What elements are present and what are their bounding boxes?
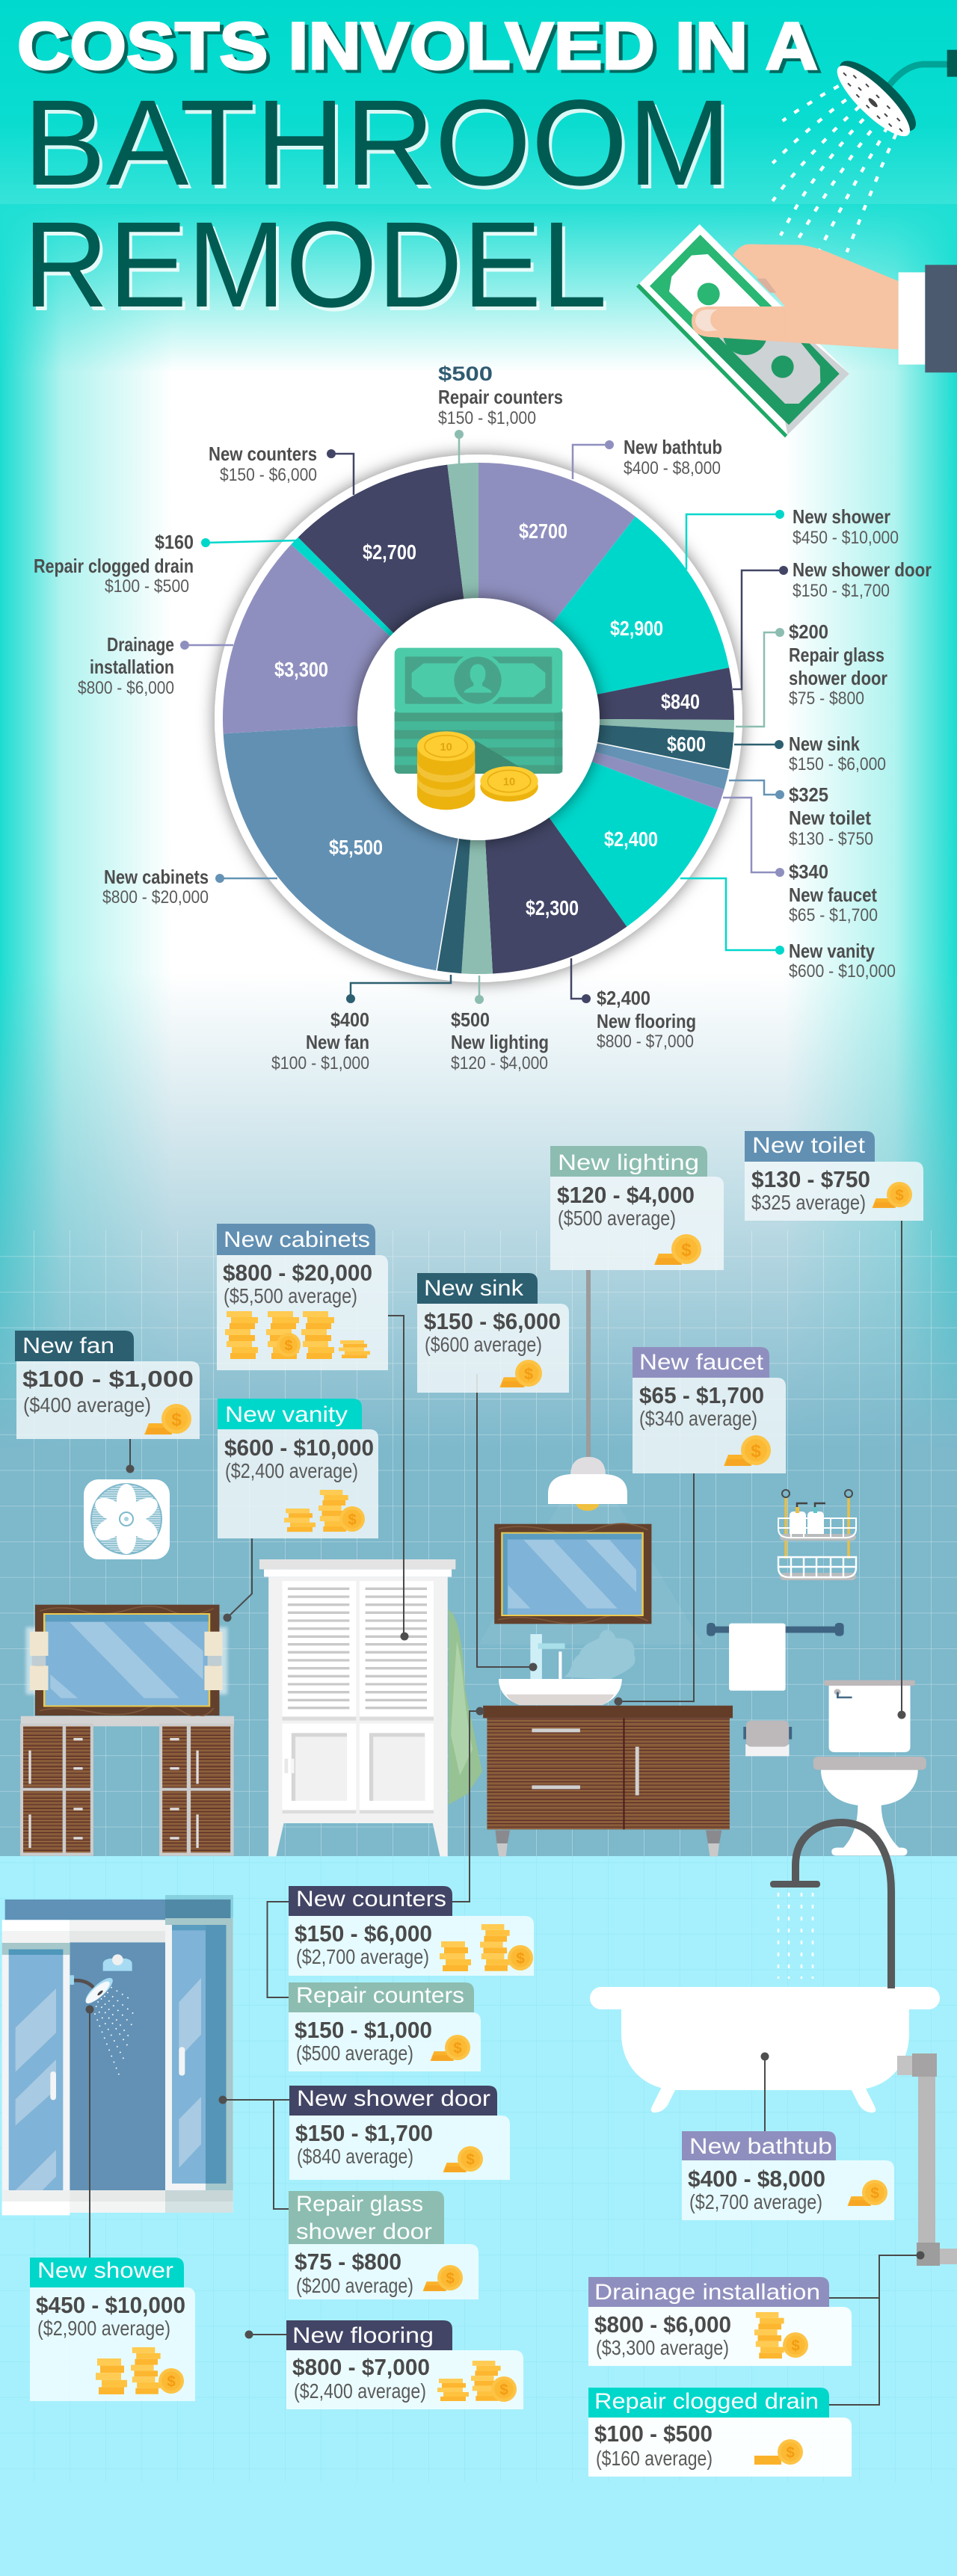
pie label: new bathtub: $400 - $8,000: [624, 458, 721, 478]
card: New shower: [30, 2258, 195, 2401]
card: New sink: New sink: [424, 1276, 524, 1301]
pie label: new fan: [271, 975, 451, 1073]
pie label: new vanity: [680, 878, 896, 982]
wall mirror: [494, 1523, 651, 1624]
coin icon: [443, 2146, 483, 2172]
coin icon: $: [453, 2041, 462, 2057]
card: New lighting: [550, 1146, 724, 1270]
card: New bathtub: New bathtub: [689, 2134, 832, 2159]
pie value labels: $2700: [519, 520, 567, 543]
vanity cabinets: [20, 1716, 234, 1856]
card: New sink: [417, 1273, 569, 1393]
card: New cabinets: ($5,500 average): [224, 1284, 357, 1307]
background: floor: [0, 1856, 957, 2576]
icon: money stack with coins: [395, 648, 562, 810]
coin icon: [724, 1435, 771, 1466]
pie slice: new fan: [437, 718, 478, 973]
pie label: repair clogged drain: $100 - $500: [105, 576, 189, 597]
card: New fan: ($400 average): [23, 1393, 151, 1417]
illustration: shower caddy shelf: [778, 1490, 856, 1580]
pie slice: repair counters: [447, 463, 478, 718]
card: New toilet: $130 - $750: [751, 1166, 870, 1192]
card: New toilet: New toilet: [752, 1133, 866, 1158]
pie slice: new cabinets: [224, 718, 478, 970]
pie slice: new vanity: [478, 718, 718, 927]
icon: money stack with coins: 10: [440, 742, 452, 754]
coin icon: $: [466, 2152, 475, 2169]
pie label: new flooring: $2,400: [597, 987, 650, 1009]
pie label: new bathtub: New bathtub: [624, 436, 722, 458]
coin stacks icon: [754, 2312, 808, 2358]
coin icon: $: [870, 2186, 879, 2202]
pie slice: repair clogged drain: [291, 537, 478, 718]
pie label: new shower: $450 - $10,000: [793, 528, 899, 548]
soap bottles: [790, 1503, 825, 1538]
card: New flooring: $800 - $7,000: [292, 2354, 430, 2380]
background: top header band: [0, 0, 957, 204]
pie slice: new lighting: [461, 718, 493, 974]
coin stacks icon: [440, 1924, 533, 1971]
title line 2: BATHROOM: [23, 74, 731, 211]
illustration: sink unit, mirror and bathroom fittings: [483, 1523, 926, 1856]
card: New shower door: New shower door: [297, 2086, 490, 2111]
card: New cabinets: $800 - $20,000: [223, 1260, 372, 1286]
card: Repair clogged drain: ($160 average): [596, 2447, 713, 2470]
pie label: repair counters: $150 - $1,000: [438, 408, 536, 428]
pie value labels: $3,300: [274, 658, 328, 681]
card: New shower: New shower: [37, 2258, 173, 2283]
pie label: new fan: New fan: [306, 1031, 369, 1053]
pie label: new sink: $150 - $6,000: [789, 754, 886, 774]
coin stacks icon: $: [167, 2374, 176, 2391]
card: New cabinets: New cabinets: [224, 1227, 370, 1252]
pie label: new shower door: [733, 558, 932, 689]
pie slice: repair glass shower door: [478, 718, 734, 733]
coin icon: $: [895, 1188, 904, 1204]
pie slice: drainage installation: [223, 544, 478, 733]
card: Repair clogged drain: [588, 2388, 852, 2477]
pie: outer white ring: [215, 455, 742, 982]
pie label: new faucet: New faucet: [789, 884, 877, 906]
card: Repair counters: Repair counters: [296, 1983, 464, 2008]
title line 1: COSTS INVOLVED IN A: [21, 11, 822, 86]
coin icon: [847, 2180, 887, 2206]
pie label: new lighting: [451, 976, 549, 1073]
pie slice: new counters: [298, 465, 478, 718]
card: New fan: $100 - $1,000: [22, 1366, 194, 1392]
pie label: new shower door: New shower door: [793, 558, 932, 581]
pie value labels: [274, 520, 706, 919]
icon: hand holding banknote: [636, 224, 957, 437]
pie label: new faucet: $340: [789, 860, 828, 883]
card: New bathtub: [682, 2131, 894, 2220]
card: New counters: [289, 1886, 534, 1976]
coin icon: [422, 2265, 463, 2291]
pie label: new flooring: New flooring: [597, 1010, 696, 1032]
coin stacks icon: $: [285, 1338, 293, 1354]
card: New fan: New fan: [22, 1334, 114, 1358]
pie label: repair glass shower door: [736, 620, 887, 727]
card: Repair counters: $150 - $1,000: [295, 2017, 432, 2043]
pie slice: new faucet: [478, 718, 724, 810]
illustration: tub faucet with hose: [770, 1822, 891, 1988]
card: New toilet: $325 average): [751, 1191, 866, 1214]
card: Repair glass shower door: Repair glass: [296, 2192, 423, 2216]
card: New cabinets: [217, 1224, 388, 1370]
coin stacks icon: $: [516, 1951, 525, 1968]
card: New counters: $150 - $6,000: [295, 1920, 432, 1947]
pie label: new sink: [734, 733, 886, 774]
card: New faucet: $65 - $1,700: [639, 1382, 764, 1408]
card: New shower door: $150 - $1,700: [295, 2120, 433, 2146]
pie label: new bathtub: [573, 436, 722, 479]
coin stacks icon: $: [791, 2338, 800, 2355]
card: New shower door: ($840 average): [297, 2145, 413, 2168]
card: Repair clogged drain: Repair clogged drain: [594, 2389, 819, 2414]
coin stacks icon: [225, 1311, 370, 1359]
pie label: new lighting: $500: [451, 1008, 490, 1031]
pie label: drainage installation: Drainage: [107, 633, 174, 656]
pie label: new cabinets: New cabinets: [104, 866, 209, 888]
card: New shower: $450 - $10,000: [36, 2292, 185, 2318]
card: Repair counters: [289, 1982, 481, 2071]
card: New bathtub: ($2,700 average): [689, 2190, 822, 2213]
pie value labels: $2,900: [610, 617, 663, 640]
card: Drainage installation: Drainage installation: [594, 2280, 820, 2305]
pie label: new vanity: $600 - $10,000: [789, 961, 896, 982]
card: New fan: [15, 1331, 200, 1439]
pie value labels: $2,400: [604, 828, 658, 851]
pie label: new counters: [209, 443, 354, 495]
pie label: new fan: $400: [330, 1008, 369, 1031]
pie label: repair clogged drain: $160: [155, 531, 194, 553]
card: New faucet: ($340 average): [639, 1407, 757, 1430]
illustration: drain pipes: [897, 2053, 957, 2266]
card: New flooring: New flooring: [292, 2323, 434, 2348]
coin icon: $: [681, 1240, 692, 1260]
pie label: new lighting: New lighting: [451, 1031, 549, 1053]
coin icon: $: [786, 2445, 795, 2462]
card: Drainage installation: $800 - $6,000: [594, 2311, 731, 2338]
card: New counters: New counters: [296, 1887, 446, 1911]
pie label: repair clogged drain: Repair clogged drain: [34, 555, 194, 577]
card: New sink: $150 - $6,000: [424, 1308, 561, 1334]
towel on bar: [707, 1623, 844, 1691]
pie slice: new shower: [478, 517, 729, 718]
toilet: [813, 1680, 926, 1855]
coin icon: [430, 2035, 470, 2061]
coin icon: [872, 1182, 912, 1208]
card: New vanity: New vanity: [225, 1402, 348, 1427]
pie slice: new flooring: [478, 718, 627, 973]
card: New faucet: [633, 1347, 786, 1473]
illustration: white cabinet: [259, 1559, 455, 1856]
pie label: repair glass shower door: shower door: [789, 667, 887, 689]
pie label: new flooring: [571, 958, 696, 1052]
card: New counters: ($2,700 average): [296, 1945, 429, 1968]
card: Repair glass shower door: shower door: [296, 2219, 432, 2244]
pie slice: new shower door: [478, 668, 734, 720]
pie label: new toilet: New toilet: [789, 807, 871, 829]
card: New sink: ($600 average): [425, 1333, 542, 1356]
illustration: vanity with mirror and lights: [20, 1605, 234, 1856]
illustration: robe on hook: [449, 1609, 482, 1805]
pie label: new shower: New shower: [793, 505, 890, 528]
title line 3: REMODEL: [23, 196, 607, 333]
pie label: new cabinets: $800 - $20,000: [102, 887, 209, 908]
card: Repair glass shower door: $75 - $800: [295, 2249, 401, 2275]
pie label: new shower door: $150 - $1,700: [793, 581, 890, 601]
pie label: new flooring: $800 - $7,000: [597, 1032, 694, 1052]
coin icon: [754, 2439, 803, 2465]
pie label: new toilet: $325: [789, 783, 828, 806]
pie slice: new bathtub: [478, 463, 636, 718]
coin stacks icon: [96, 2347, 184, 2394]
card: New lighting: ($500 average): [558, 1207, 676, 1230]
background: white glow across the page: [0, 204, 957, 1475]
pie label: new toilet: [729, 780, 873, 849]
card: New vanity: ($2,400 average): [225, 1459, 358, 1482]
coin icon: $: [171, 1410, 182, 1430]
background: teal field behind pie: [0, 204, 957, 1475]
pie label: repair counters: [438, 363, 563, 464]
card: New shower: ($2,900 average): [37, 2317, 170, 2340]
coin icon: $: [524, 1364, 533, 1383]
pie label: new faucet: [723, 798, 878, 925]
card: New shower door: [289, 2086, 510, 2180]
pie label: new counters: $150 - $6,000: [220, 465, 317, 485]
pie label: drainage installation: installation: [90, 656, 174, 678]
pie centre hole: [357, 598, 600, 840]
pie label: repair glass shower door: Repair glass: [789, 644, 884, 666]
pie label: new sink: New sink: [789, 733, 860, 755]
pie label: new lighting: $120 - $4,000: [451, 1053, 548, 1073]
coin icon: [654, 1234, 701, 1265]
background: teal fade under header: [0, 204, 957, 372]
coin icon: $: [751, 1441, 761, 1461]
pie value labels: $600: [667, 733, 706, 756]
card: New vanity: [218, 1399, 378, 1538]
card: New bathtub: $400 - $8,000: [688, 2166, 825, 2192]
card: New toilet: [745, 1131, 923, 1221]
title line 2: BATHROOM: [26, 78, 734, 215]
card: Repair glass shower door: [289, 2191, 478, 2299]
pie value labels: $2,700: [363, 540, 416, 564]
card: Drainage installation: ($3,300 average): [596, 2336, 729, 2359]
pie label: drainage installation: [78, 633, 233, 698]
pie chart: [215, 455, 742, 982]
icon: shower head with water: [772, 50, 957, 252]
coin stacks icon: [437, 2361, 517, 2402]
pie label: new faucet: $65 - $1,700: [789, 905, 878, 925]
pie label: repair counters: $500: [438, 363, 493, 385]
pie label: drainage installation: $800 - $6,000: [78, 678, 174, 698]
card: New lighting: New lighting: [558, 1150, 699, 1175]
background: fade to wall colour: [0, 972, 957, 1450]
coin stacks icon: $: [499, 2382, 508, 2399]
card: New vanity: $600 - $10,000: [224, 1435, 374, 1461]
toilet paper roll: [743, 1721, 792, 1756]
pie label: new shower: [686, 505, 899, 570]
card: New flooring: ($2,400 average): [294, 2379, 426, 2403]
vanity mirror: [26, 1605, 227, 1716]
pie slice: new sink: [478, 718, 734, 770]
sink cabinet: [483, 1706, 733, 1856]
coin icon: $: [446, 2271, 455, 2287]
pie slice: new toilet: [478, 718, 729, 789]
illustration: ceiling lamp: [478, 1270, 703, 1645]
pie value labels: $2,300: [526, 896, 579, 919]
title: [17, 8, 822, 336]
coin icon: [144, 1404, 191, 1435]
pie label: new counters: New counters: [209, 443, 317, 465]
icon: wall fan: [84, 1479, 170, 1559]
pie value labels: $5,500: [329, 836, 383, 859]
title line 1: COSTS INVOLVED IN A: [17, 8, 818, 83]
card: Drainage installation: [588, 2277, 852, 2366]
pie label: new fan: $100 - $1,000: [271, 1053, 369, 1073]
icon: money stack with coins: 10: [503, 777, 515, 789]
pie label: repair clogged drain: [34, 531, 296, 597]
coin stacks icon: [284, 1490, 365, 1532]
card: Repair clogged drain: $100 - $500: [594, 2421, 713, 2447]
background: tiled wall: [0, 1450, 957, 1856]
card: New flooring: [286, 2320, 523, 2409]
title line 3: REMODEL: [26, 200, 610, 336]
pie label: new toilet: $130 - $750: [789, 829, 873, 849]
pie label: repair counters: Repair counters: [438, 386, 563, 408]
sink with faucet: [499, 1630, 636, 1705]
illustration: bathtub: [590, 1987, 940, 2113]
card: New faucet: New faucet: [639, 1350, 764, 1375]
illustration: shower cabin: [2, 1895, 233, 2215]
card: Repair counters: ($500 average): [296, 2042, 413, 2065]
connector lines: [85, 1221, 924, 2405]
pie label: new cabinets: [102, 866, 277, 908]
pie label: new vanity: New vanity: [789, 940, 875, 962]
card: Repair glass shower door: ($200 average): [296, 2274, 413, 2297]
pie label: repair glass shower door: $200: [789, 620, 828, 643]
card: New lighting: $120 - $4,000: [557, 1182, 695, 1208]
pie label: repair glass shower door: $75 - $800: [789, 688, 864, 709]
coin stacks icon: $: [348, 1512, 357, 1529]
coin icon: [499, 1360, 542, 1387]
pie value labels: $840: [661, 690, 700, 713]
